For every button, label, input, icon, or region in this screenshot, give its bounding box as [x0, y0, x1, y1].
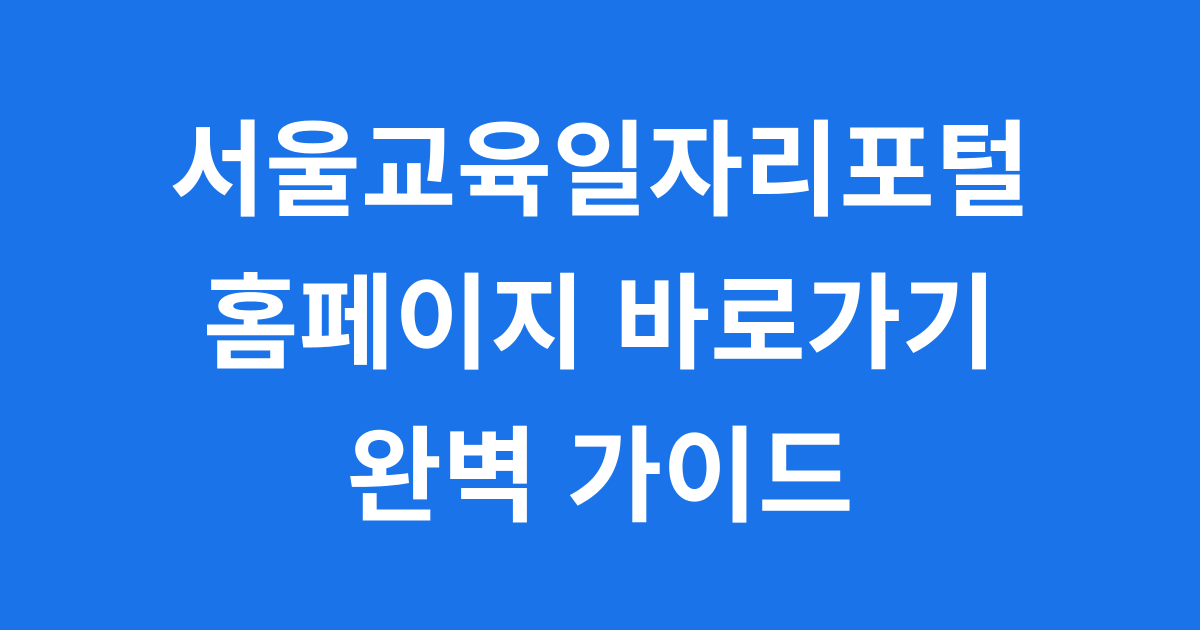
title: 홈페이지 바로가기 [203, 267, 997, 383]
title: 서울교육일자리포털 [169, 114, 1031, 230]
title: 완벽 가이드 [346, 420, 854, 536]
